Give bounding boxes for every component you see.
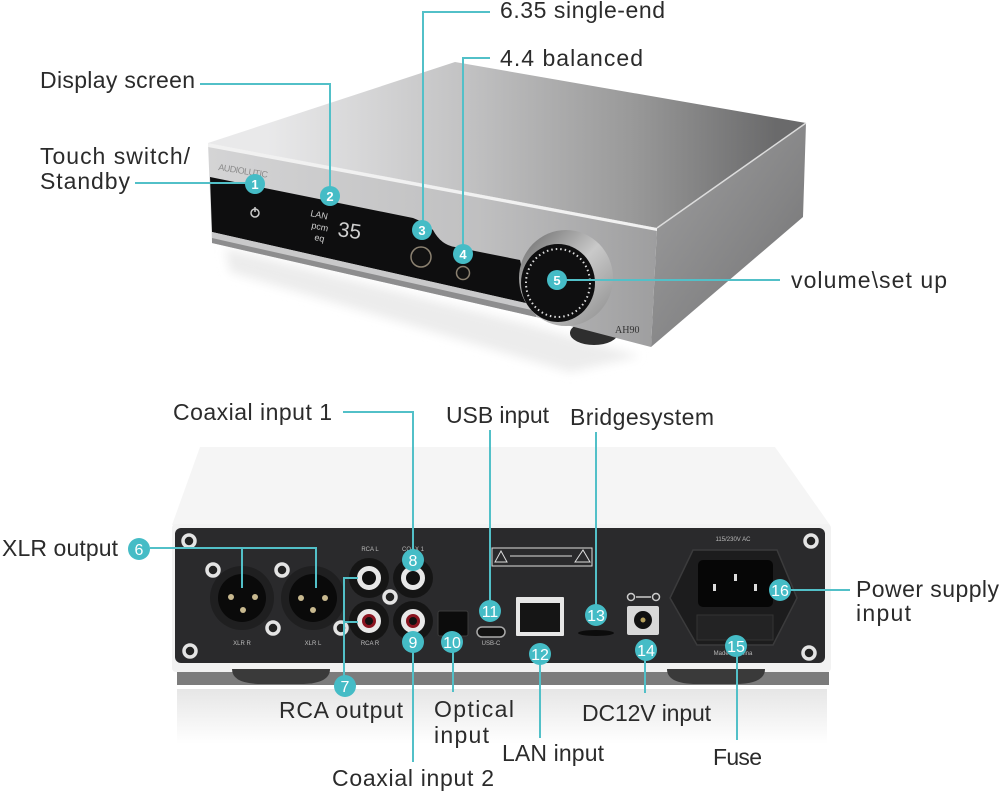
display band	[210, 177, 530, 304]
callout text labels: Coaxial input 2	[332, 765, 494, 791]
numbered badges: 4	[459, 247, 467, 262]
callout text labels: Optical	[434, 696, 514, 722]
silk-screen labels: Made in China	[714, 651, 753, 657]
numbered badges: 8	[409, 553, 418, 570]
caution label	[492, 548, 592, 566]
display readout: LAN	[310, 208, 329, 222]
callout text labels: volume\set up	[791, 267, 947, 293]
front panel	[208, 143, 657, 347]
callout text labels: XLR output	[2, 535, 119, 561]
DC jack	[627, 606, 659, 635]
callout text labels: Bridgesystem	[570, 404, 714, 430]
numbered badges: 13	[587, 608, 605, 625]
silk-screen labels: USB-C	[482, 641, 501, 647]
numbered badges: 3	[418, 223, 426, 238]
headphone jack 4.4	[456, 266, 470, 280]
model label: AH90	[615, 325, 639, 336]
silk-screen labels: XLR L	[305, 641, 322, 647]
top surface	[208, 62, 806, 228]
numbered badges: 9	[409, 635, 418, 652]
numbered badges: 1	[251, 177, 259, 192]
numbered badges: 2	[326, 189, 334, 204]
RCA connectors	[349, 558, 433, 641]
silk-screen labels	[233, 537, 753, 657]
callout text labels: 4.4 balanced	[500, 45, 643, 71]
foot	[570, 321, 618, 345]
USB-C port	[477, 627, 505, 637]
numbered badges: 7	[341, 679, 350, 696]
slot	[578, 630, 614, 636]
numbered badges: 12	[531, 647, 549, 664]
numbered badges: 6	[135, 542, 144, 559]
feet	[232, 669, 330, 684]
numbered badges: 5	[553, 273, 561, 288]
callout text labels: DC12V input	[582, 700, 712, 726]
LAN port	[516, 597, 564, 636]
numbered badges: 15	[727, 639, 745, 656]
XLR R connector	[210, 566, 274, 630]
icon: power symbol	[251, 207, 259, 217]
numbered badges	[128, 174, 791, 697]
rear product: amplifier rear view	[172, 447, 831, 744]
XLR L connector	[281, 566, 345, 630]
callout text labels: Power supply	[856, 576, 1000, 602]
callout text labels: Standby	[40, 168, 130, 194]
brand mark: AUDIOLUTIC	[218, 162, 269, 180]
rear chassis frame	[172, 524, 831, 672]
display readout	[310, 208, 363, 244]
numbered badges: 16	[771, 583, 789, 600]
silk-screen labels: 115/230V AC	[716, 537, 751, 543]
headphone jack 6.35	[411, 247, 431, 267]
callout text labels: USB input	[446, 402, 550, 428]
callout text labels: LAN input	[502, 740, 605, 766]
front product: amplifier front view	[208, 62, 806, 372]
screws	[183, 535, 817, 659]
volume knob	[519, 230, 613, 326]
base bar	[177, 672, 829, 685]
callout text labels: input	[856, 600, 912, 626]
numbered badges: 11	[482, 604, 498, 621]
reflection	[177, 689, 827, 744]
icon: polarity	[628, 594, 660, 600]
rear black panel	[175, 528, 825, 663]
callout text labels: Coaxial input 1	[173, 399, 332, 425]
optical port	[438, 611, 468, 636]
callout text labels: RCA output	[279, 697, 404, 723]
display readout: 35	[336, 218, 363, 244]
callout text labels: Fuse	[713, 744, 762, 770]
silk-screen labels: XLR R	[233, 641, 252, 647]
power socket module	[670, 550, 797, 645]
display readout: pcm	[311, 220, 329, 233]
callout lines	[135, 12, 850, 762]
silk-screen labels: RCA L	[361, 547, 379, 553]
display readout: eq	[314, 232, 325, 244]
right side panel	[651, 123, 806, 347]
numbered badges: 10	[443, 635, 461, 652]
callout text labels: input	[434, 722, 490, 748]
silk-screen labels: COAX 1	[402, 547, 425, 553]
silk-screen labels: RCA R	[361, 641, 380, 647]
top surface rear	[172, 447, 830, 525]
callout text labels: Display screen	[40, 67, 195, 93]
numbered badges: 14	[637, 643, 655, 660]
callout text labels: Touch switch/	[40, 143, 191, 169]
